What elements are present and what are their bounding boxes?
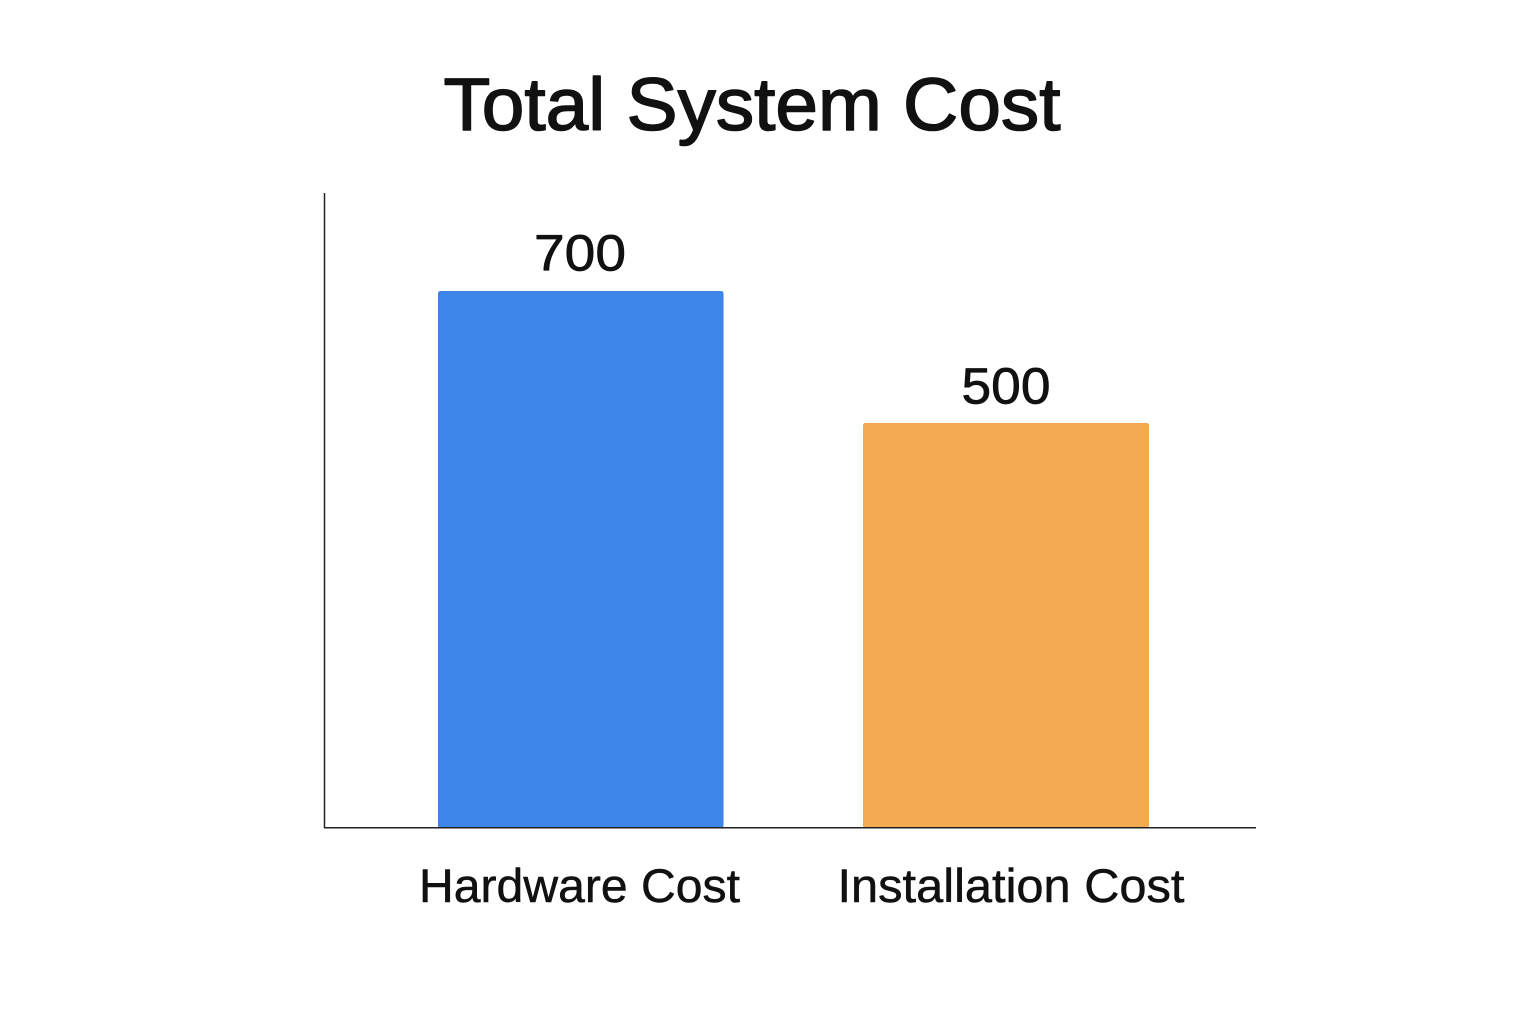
category label: hardware cost: Hardware Cost: [419, 859, 740, 912]
value label: 700: 700: [534, 224, 626, 282]
axes: [324, 193, 1256, 828]
category label: installation cost: Installation Cost: [838, 859, 1184, 912]
bar: hardware cost: [438, 292, 723, 828]
title: Total System Cost: [444, 63, 1061, 146]
value label: 500: 500: [962, 358, 1050, 414]
bar: installation cost: [864, 424, 1148, 828]
